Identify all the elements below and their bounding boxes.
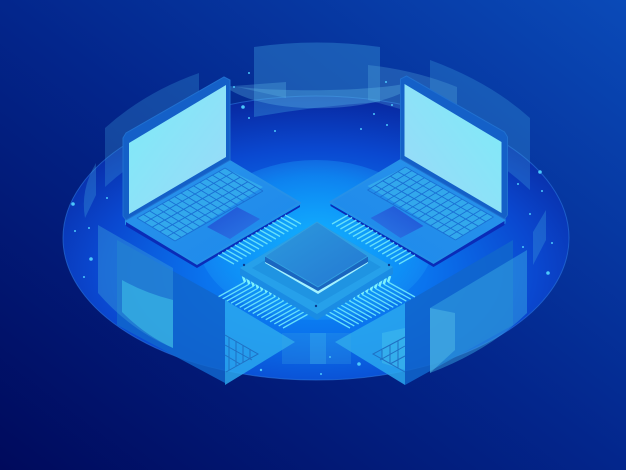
laptop: bottom right translucent [335,240,527,385]
panel: far right translucent [533,210,546,265]
laptop: top right [330,76,508,267]
panel: bottom centre translucent [282,333,351,364]
light band between the laptops [230,84,404,108]
processor chip [240,222,393,320]
circuit traces: lower right [323,276,415,328]
panel: far left translucent [84,163,96,218]
laptop: top left [123,77,300,268]
panel: top right translucent [430,60,530,190]
panel: upper centre left translucent [233,82,286,98]
circuit traces: upper right [332,215,415,264]
circuit traces: upper left [218,215,301,264]
panel: upper centre right translucent [368,65,457,125]
stars [71,72,553,375]
holographic disc [63,96,569,380]
circuit traces: lower left [218,276,310,328]
laptop: bottom left translucent [98,225,295,385]
panel: top left translucent [105,73,199,187]
panel: top centre translucent [254,42,380,117]
